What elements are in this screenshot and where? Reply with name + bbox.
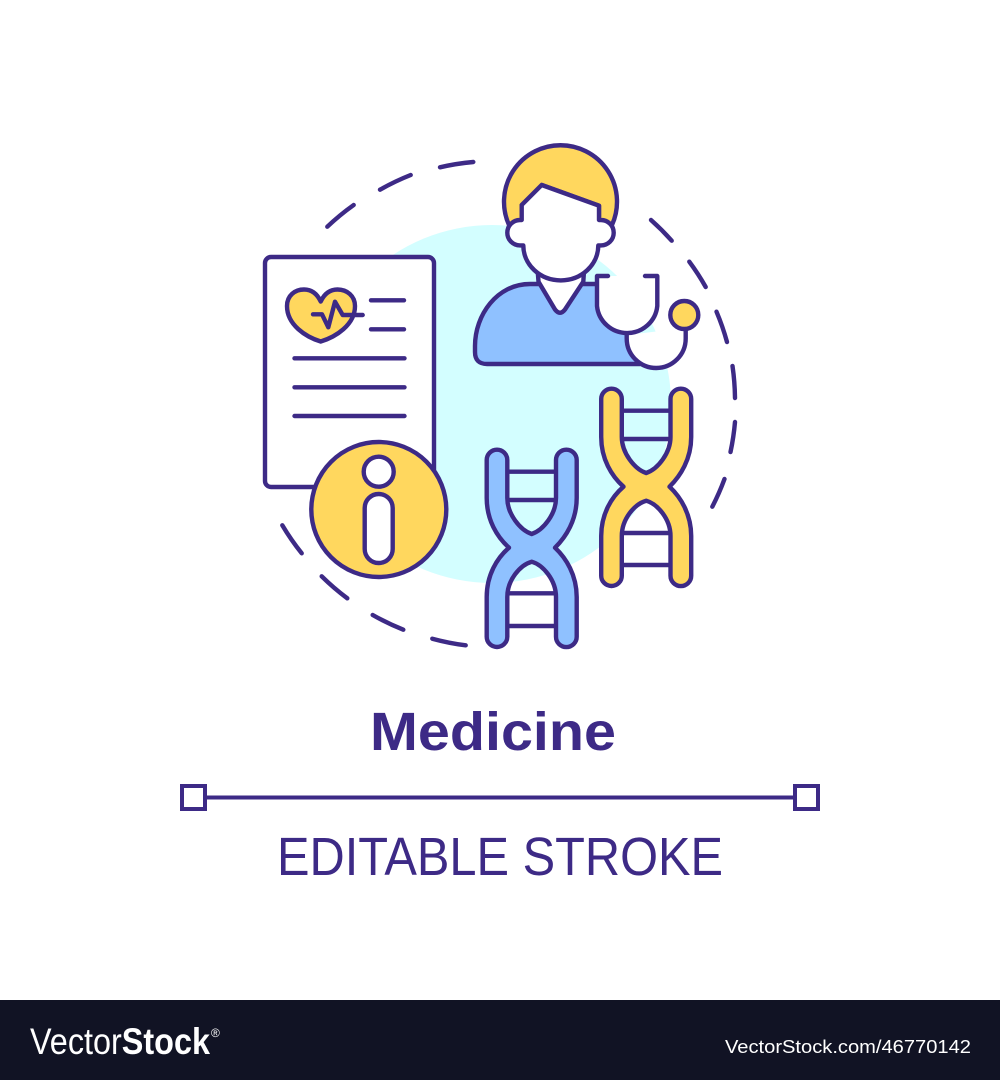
doctor body: [475, 284, 640, 364]
icon: info badge: [311, 442, 446, 577]
stethoscope earpiece tube: [597, 276, 657, 333]
background circle: light cyan: [313, 225, 671, 583]
footer registered mark: ®: [211, 1026, 220, 1040]
doctor hair: [504, 145, 617, 225]
editable stroke line with end handles: [182, 786, 818, 809]
stethoscope lower tube: [627, 328, 686, 368]
icon: blue DNA strand: [487, 450, 577, 647]
doctor collar: [538, 271, 584, 313]
footer image id: VectorStock.com/46770142: [725, 1036, 971, 1057]
stethoscope chest piece: [670, 301, 698, 329]
doctor face: [507, 185, 614, 280]
icon: medical document: [265, 257, 434, 487]
document text lines: [294, 300, 404, 416]
footer logo: VectorStock: [30, 1021, 210, 1062]
subtitle: EDITABLE STROKE: [277, 827, 723, 887]
icon: heart with pulse: [287, 290, 363, 342]
dashed ring: [282, 162, 735, 645]
document sheet: [265, 257, 434, 487]
title: Medicine: [370, 702, 616, 762]
icon: doctor with stethoscope: [475, 145, 698, 368]
footer bar: [0, 1000, 1000, 1080]
icon: yellow DNA strand: [601, 389, 691, 586]
